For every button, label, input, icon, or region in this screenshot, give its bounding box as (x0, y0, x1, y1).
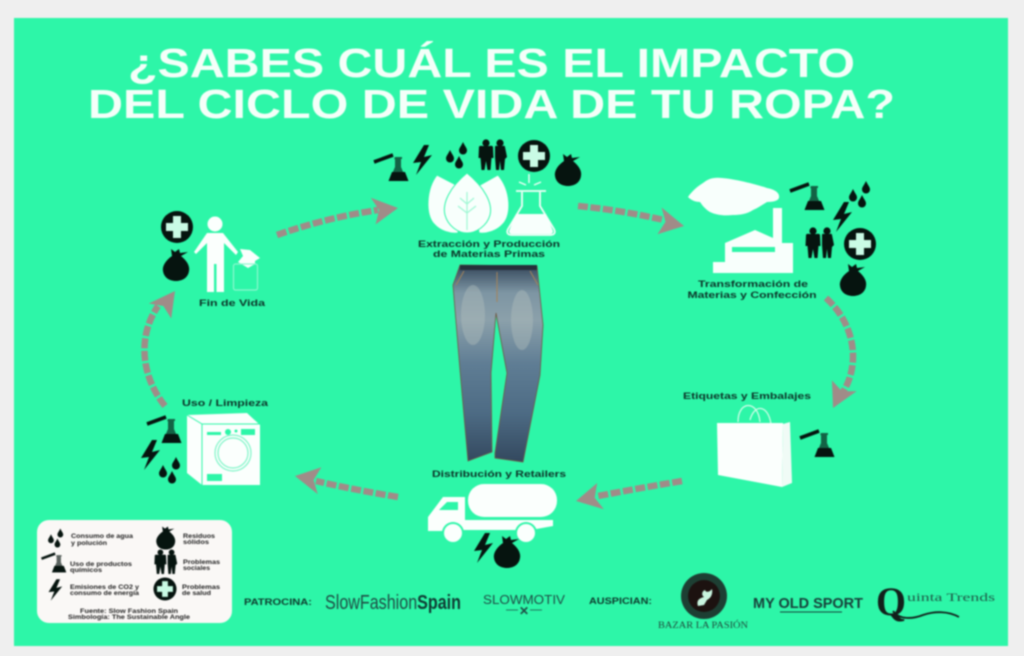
icon: washing machine (187, 413, 260, 485)
label (688, 279, 817, 301)
legend texts: Problemas (183, 560, 221, 566)
impact icons row (374, 139, 581, 186)
label (418, 239, 560, 260)
impact icons (161, 211, 193, 281)
label: Transformación de (698, 279, 808, 290)
title: DEL CICLO DE VIDA DE TU ROPA? (88, 81, 895, 127)
label: Distribución y Retailers (432, 469, 566, 480)
icon: chemicals (800, 431, 834, 457)
auspices heading: AUSPICIAN: (589, 596, 652, 606)
legend texts: Residuos (183, 534, 216, 540)
icon: person throwing shirt (194, 216, 260, 292)
title (88, 40, 895, 127)
legend texts: Consumo de agua (71, 534, 134, 540)
icon: tanker truck (428, 484, 557, 544)
legend texts (68, 534, 221, 621)
stage: fin de vida (161, 211, 266, 309)
icon: beaker (507, 174, 555, 235)
photo: jeans (453, 265, 543, 462)
stage: transformación de materias y confección (688, 178, 876, 301)
logo: Bazar la Pasión: BAZAR LA PASIÓN (658, 619, 748, 631)
logo: SlowFashionSpain: SlowFashionSpain (325, 592, 461, 614)
icon: shopping bag (717, 406, 792, 487)
stage: uso / limpieza (141, 398, 269, 485)
arrow: transformación to etiquetas (821, 298, 857, 414)
logo: Slowmotiv: ✕ (519, 604, 529, 618)
impact icons (474, 533, 520, 568)
logo: Bazar la Pasión (658, 573, 748, 631)
panel: legend (37, 520, 232, 623)
logo: Quinta Trends: uinta Trends (907, 590, 995, 604)
arrow: materias primas to transformación (578, 206, 687, 240)
stage: extracción y producción de materias primas (374, 139, 581, 260)
logo: Quinta Trends: Q (876, 579, 906, 624)
legend texts: Uso de productos (70, 562, 133, 568)
legend texts: Simbología: The Sustainable Angle (68, 615, 191, 621)
sponsors heading: PATROCINA: (244, 597, 312, 607)
legend texts: sólidos (183, 540, 210, 546)
legend texts: químicos (70, 568, 103, 574)
title: ¿SABES CUÁL ES EL IMPACTO (128, 40, 855, 86)
impact icons (141, 417, 182, 484)
label: Etiquetas y Embalajes (683, 391, 811, 402)
legend texts: sociales (183, 566, 211, 572)
arrow: fin de vida to materias primas (277, 195, 399, 235)
legend texts: consumo de energía (70, 591, 140, 597)
arrow: distribución to uso (292, 462, 398, 497)
label: de Materias Primas (433, 249, 545, 260)
legend texts: Problemas (182, 585, 221, 591)
logo: Quinta Trends (876, 579, 995, 624)
label: Fin de Vida (199, 298, 266, 309)
label: Uso / Limpieza (182, 398, 269, 409)
legend background (37, 520, 232, 623)
impact icons (790, 181, 876, 296)
logo: Slowmotiv: SLOWMOTIV (483, 592, 565, 607)
legend icons (41, 526, 177, 601)
arrow: uso to fin de vida (144, 283, 186, 406)
legend texts: Fuente: Slow Fashion Spain (80, 609, 178, 615)
label: Materias y Confección (688, 290, 817, 301)
stage: distribución y retailers (428, 469, 566, 568)
stage: etiquetas y embalajes (683, 391, 834, 487)
legend texts: y polución (71, 541, 107, 547)
legend texts: Emisiones de CO2 y (70, 585, 140, 591)
icon: leaves (428, 173, 509, 233)
legend texts: de salud (182, 591, 211, 597)
label: Extracción y Producción (418, 239, 560, 250)
icon: factory with smoke (688, 178, 793, 273)
logo: Slowmotiv (483, 592, 565, 618)
arrow: etiquetas to distribución (574, 481, 682, 514)
logo: My Old Sport: MY OLD SPORT (753, 595, 863, 612)
